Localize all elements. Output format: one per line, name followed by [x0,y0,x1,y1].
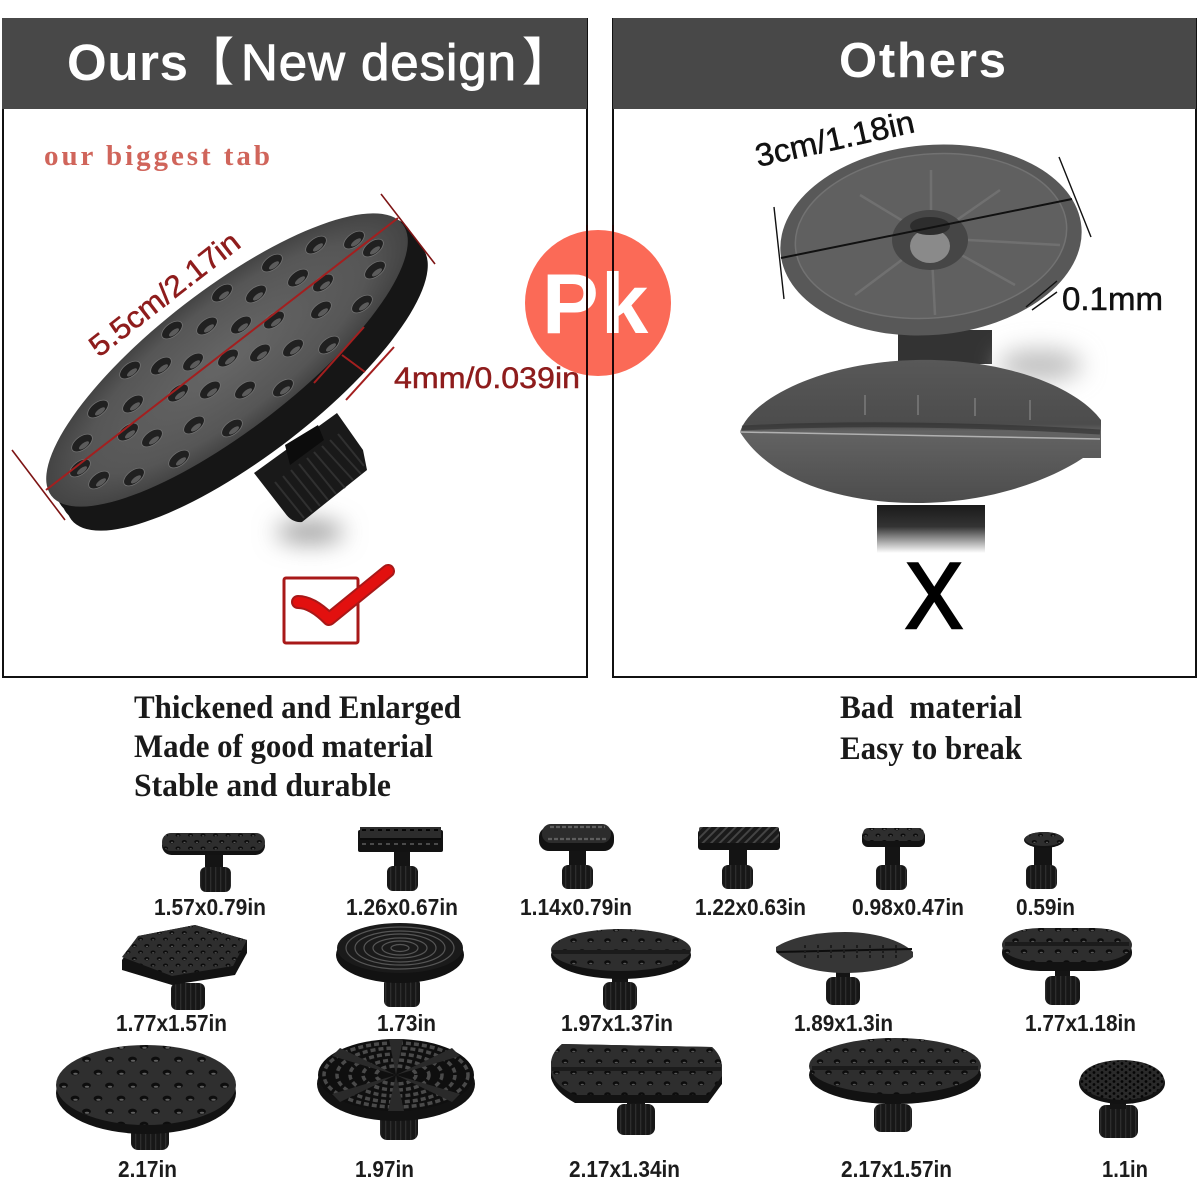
tab 1.77x1.57in hexagonal [122,925,247,1010]
text block: others drawbacks: Easy to break [840,731,1023,767]
label 1.97x1.37in: 1.97x1.37in [561,1010,673,1036]
tab 1.97in grooved [317,1039,475,1140]
heading bar: ours [2,18,587,109]
panel frame: others [613,19,1196,677]
text block: others drawbacks: Bad material [840,690,1022,726]
illustration: thin competitor tabs [740,132,1101,553]
tab 1.73in concentric [336,923,464,1007]
dimension lines: others [774,157,1091,310]
label: diameter 5.5cm/2.17in: 5.5cm/2.17in [83,225,247,364]
tab 0.59in [1024,832,1064,889]
heading: others: Others [839,34,1006,88]
heading: ours new design: 】 [522,34,573,91]
lower stem fading out [877,505,985,553]
label 2.17in: 2.17in [118,1156,177,1182]
tab 2.17x1.34in [551,1044,722,1135]
label 1.77x1.57in: 1.77x1.57in [116,1010,227,1036]
tab 0.98x0.47in [862,828,925,890]
label 1.1in: 1.1in [1102,1156,1148,1182]
label 0.98x0.47in: 0.98x0.47in [852,894,964,920]
text block: ours benefits: Made of good material [134,729,433,765]
tab 2.17x1.57in [809,1038,981,1132]
label 2.17x1.57in: 2.17x1.57in [841,1156,952,1182]
tab 1.26x0.67in [358,827,443,891]
label: thickness 4mm/0.039in: 4mm/0.039in [394,362,580,395]
text block: ours benefits: Thickened and Enlarged [134,690,461,726]
label: thickness 0.1mm: 0.1mm [1062,281,1163,317]
label: diameter 3cm/1.18in: 3cm/1.18in [752,104,918,174]
heading bar: others [613,18,1196,109]
tab 1.77x1.18in [1002,928,1132,1005]
heading: ours new design: 【 [183,34,234,91]
size chart: tab collection [56,824,1165,1182]
badge: Pk comparison: P [542,257,599,352]
label 1.73in: 1.73in [377,1010,436,1036]
disc holes [67,228,388,492]
tab 1.1in [1079,1060,1165,1138]
icon: black X mark: X [905,543,963,648]
heading: ours new design [67,34,573,91]
label 1.14x0.79in: 1.14x0.79in [520,894,632,920]
label 1.89x1.3in: 1.89x1.3in [794,1010,893,1036]
illustration: big round tab [9,169,465,575]
heading: ours new design: Ours [67,34,188,91]
label 1.97in: 1.97in [355,1156,414,1182]
tab 1.14x0.79in [539,824,614,889]
tab 1.89x1.3in lens [776,932,913,1005]
disc body [14,172,465,575]
tab 2.17in round [56,1045,236,1150]
label 1.26x0.67in: 1.26x0.67in [346,894,458,920]
badge: Pk comparison: k [601,257,649,352]
disc top surface [9,169,445,551]
text block: ours benefits [134,690,461,804]
tab 1.97x1.37in [551,929,691,1010]
text block: ours benefits: Stable and durable [134,768,391,804]
stem shadow [276,521,344,543]
panel: ours [2,18,587,677]
knurled stem [254,413,367,522]
stem between discs [898,330,992,364]
text block: others drawbacks [840,690,1023,767]
panel: others [613,18,1196,677]
upper disc [772,132,1090,348]
label 2.17x1.34in: 2.17x1.34in [569,1156,680,1182]
label 1.57x0.79in: 1.57x0.79in [154,894,266,920]
label 1.22x0.63in: 1.22x0.63in [695,894,806,920]
heading: ours new design: New design [241,34,516,91]
label 0.59in: 0.59in [1016,894,1075,920]
badge: Pk comparison [525,225,671,380]
tab 1.57x0.79in [162,833,265,892]
tab 1.22x0.63in [698,827,780,889]
panel frame: ours [3,19,587,677]
lower lens-shaped disc [740,360,1101,503]
shadow [998,349,1082,381]
dimension lines: diameter and thickness [12,194,435,520]
icon: red check mark in box [284,571,388,643]
label 1.77x1.18in: 1.77x1.18in [1025,1010,1136,1036]
caption: our biggest tab: our biggest tab [44,140,270,172]
